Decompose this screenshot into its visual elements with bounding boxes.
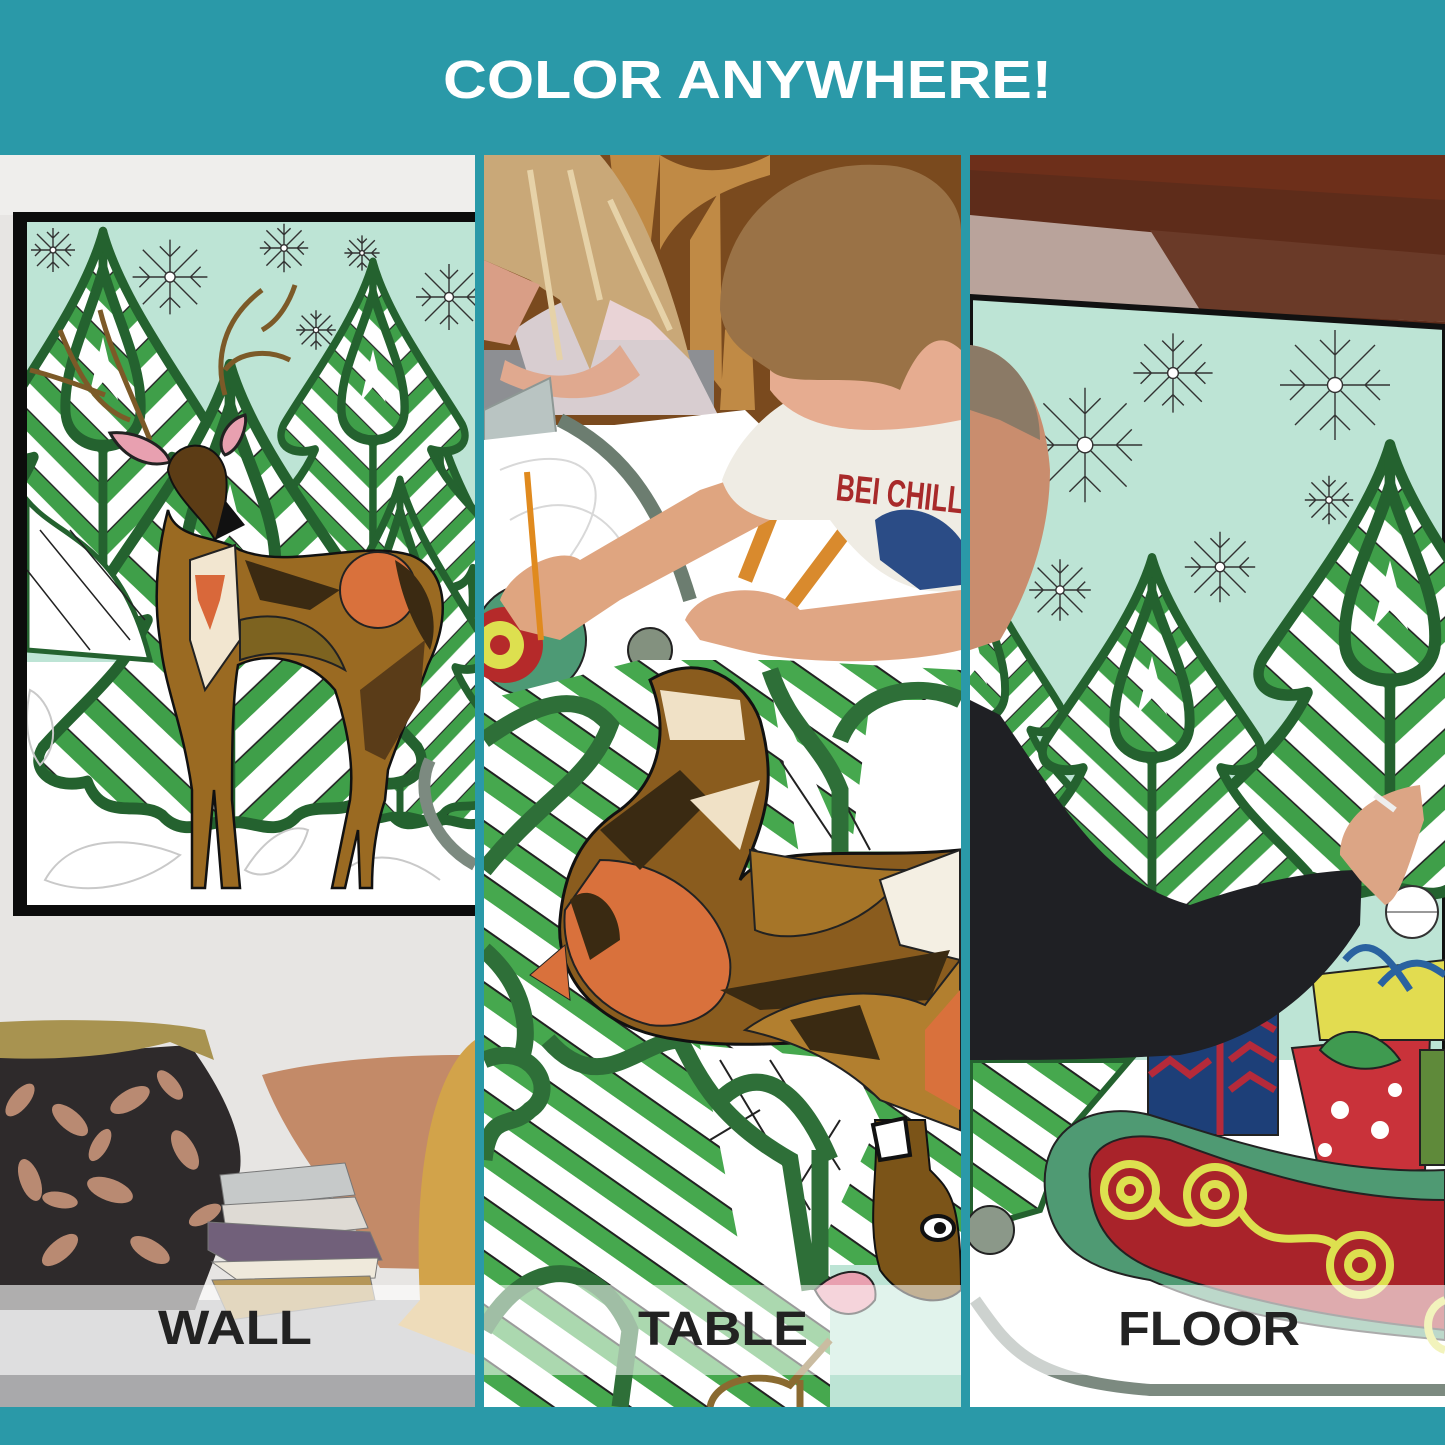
man — [970, 345, 1424, 1060]
panel: floor — [970, 155, 1445, 1407]
wood floor — [970, 155, 1445, 325]
floor poster — [970, 294, 1445, 1396]
label band: table — [484, 1285, 961, 1375]
frame — [13, 212, 475, 916]
panel: table — [467, 155, 966, 1407]
label band: floor — [970, 1285, 1445, 1375]
boy — [500, 165, 966, 661]
deer head — [710, 1118, 961, 1407]
poster trees — [27, 226, 475, 884]
floor trees — [847, 445, 1445, 1230]
yellow chair — [398, 1040, 475, 1355]
floor rug — [0, 1300, 475, 1407]
framed poster — [27, 222, 475, 905]
paper with ring — [484, 410, 759, 602]
snow swirls — [27, 690, 440, 888]
sleigh — [966, 1111, 1445, 1390]
girl — [484, 155, 718, 415]
pillow — [262, 1055, 475, 1270]
dining room background — [484, 155, 961, 425]
book stack — [208, 1163, 382, 1320]
ornament — [1386, 886, 1438, 938]
crayon box — [484, 376, 557, 440]
snowflakes — [31, 224, 482, 350]
label: wall: WALL — [158, 1302, 312, 1355]
basket — [0, 1045, 241, 1310]
label: floor: FLOOR — [1118, 1303, 1300, 1356]
title: COLOR ANYWHERE! — [443, 50, 1052, 110]
label: table: TABLE — [638, 1303, 808, 1356]
boy: BEI CHILL — [834, 467, 966, 522]
room furniture — [0, 1020, 475, 1407]
swirl ornament — [484, 588, 673, 694]
label band: wall — [0, 1285, 475, 1375]
table poster trees — [484, 660, 961, 1407]
deer — [30, 285, 443, 888]
gifts — [1148, 948, 1445, 1175]
floor snowflakes — [1028, 330, 1390, 621]
deer body — [530, 668, 960, 1130]
panel: wall — [0, 155, 475, 1407]
